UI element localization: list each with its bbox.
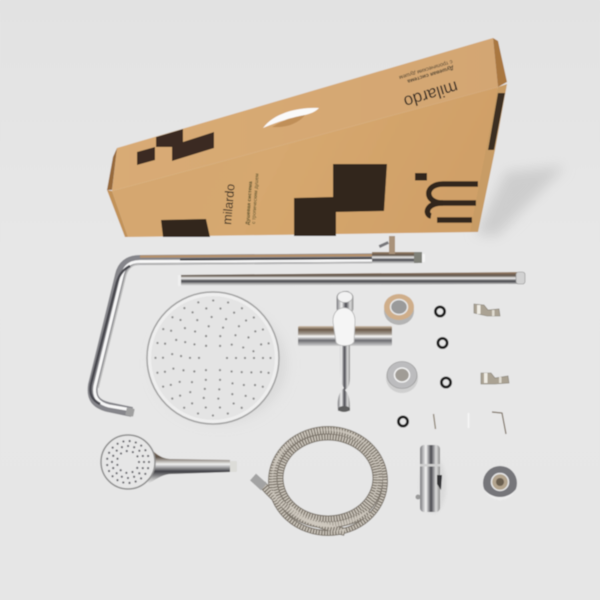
hex key [492, 412, 506, 434]
box top face [112, 38, 498, 191]
top face square logo [137, 129, 214, 165]
brand: milardo: milardo [402, 77, 460, 112]
arm diverter fitting [372, 236, 425, 264]
hand shower cap [230, 461, 237, 472]
handle cutout [263, 108, 319, 128]
flexible hose [253, 429, 385, 533]
box flaps [107, 38, 507, 237]
sliding bracket [416, 445, 446, 513]
straight riser pipe [178, 272, 525, 286]
hand shower [101, 435, 237, 489]
plastic anchor [468, 413, 470, 428]
hand shower handle [148, 448, 230, 484]
eccentric connector lower [481, 373, 509, 384]
box shadow [476, 166, 565, 236]
hose coil dark base [262, 429, 385, 533]
wall elbow outlet [483, 466, 517, 500]
hand shower head [101, 435, 155, 489]
mixer knob [336, 291, 354, 315]
hose coil bright winding [262, 429, 385, 533]
inverted brand text [402, 64, 460, 112]
front large black blocks [294, 164, 387, 236]
flange ring lower [386, 362, 418, 393]
shower head [147, 292, 286, 424]
hose end connector [253, 477, 264, 487]
mixer body [298, 326, 392, 346]
spout [338, 345, 350, 411]
product subtitle inverted: с тропическим душем [398, 58, 453, 80]
flange ring upper [384, 294, 414, 325]
mixer handle [333, 308, 355, 346]
arm tip [125, 407, 135, 417]
front subtitle: с тропическим душем [251, 173, 261, 224]
nozzle dots [156, 300, 270, 416]
hand shower nozzles [107, 441, 149, 483]
screw [434, 414, 436, 429]
shower arm pipe [90, 236, 425, 417]
box front face [112, 87, 498, 237]
front brand: milardo: milardo [220, 183, 238, 225]
m logo [415, 173, 478, 220]
product description: Душевая система [406, 64, 454, 84]
front description: Душевая система [245, 181, 254, 225]
front left block [161, 219, 210, 237]
bath mixer faucet [298, 291, 392, 412]
eccentric connector upper [474, 304, 500, 316]
spout tip [338, 406, 350, 412]
cardboard box [107, 38, 507, 237]
rubber O-rings [398, 307, 451, 426]
